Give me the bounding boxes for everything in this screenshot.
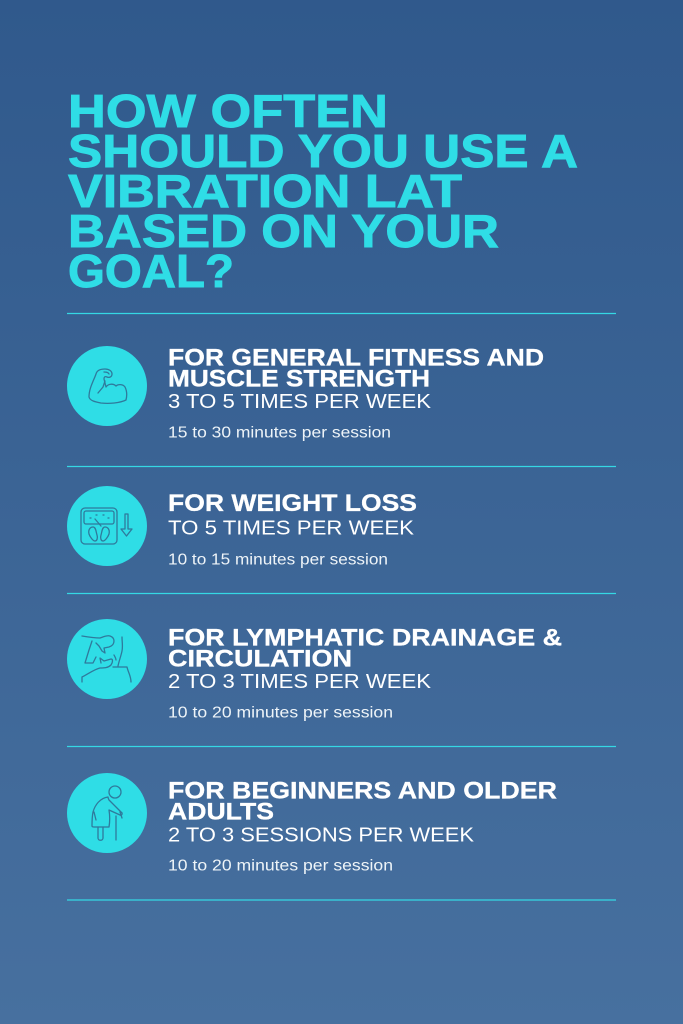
heading bbox=[168, 344, 544, 392]
heading bbox=[168, 778, 557, 826]
frequency: 3 TO 5 TIMES PER WEEK bbox=[168, 391, 432, 413]
frequency: TO 5 TIMES PER WEEK bbox=[168, 518, 415, 540]
heading: MUSCLE STRENGTH bbox=[168, 366, 430, 392]
title: VIBRATION LAT bbox=[68, 165, 462, 217]
icon: scale with down arrow bbox=[67, 486, 147, 566]
heading: FOR GENERAL FITNESS AND bbox=[168, 344, 544, 372]
title: HOW OFTEN bbox=[68, 85, 388, 137]
icon: older person with cane bbox=[67, 773, 147, 853]
icon: flexed arm bbox=[67, 346, 147, 426]
heading: FOR BEGINNERS AND OLDER bbox=[168, 778, 557, 804]
icon: massage hands on torso bbox=[67, 619, 147, 699]
title bbox=[68, 85, 578, 297]
panel: weight loss bbox=[67, 486, 417, 568]
duration: 10 to 20 minutes per session bbox=[168, 704, 393, 722]
heading: ADULTS bbox=[168, 798, 274, 826]
heading: FOR WEIGHT LOSS bbox=[168, 490, 417, 517]
title: GOAL? bbox=[68, 245, 234, 297]
panel: general fitness and muscle strength bbox=[67, 344, 544, 442]
duration: 15 to 30 minutes per session bbox=[168, 424, 391, 442]
title: BASED ON YOUR bbox=[68, 205, 499, 257]
title: SHOULD YOU USE A bbox=[68, 125, 578, 177]
frequency: 2 TO 3 TIMES PER WEEK bbox=[168, 671, 432, 693]
duration: 10 to 15 minutes per session bbox=[168, 552, 388, 568]
duration: 10 to 20 minutes per session bbox=[168, 858, 393, 874]
frequency: 2 TO 3 SESSIONS PER WEEK bbox=[168, 824, 475, 846]
panel: lymphatic drainage and circulation bbox=[67, 619, 562, 722]
panel: beginners and older adults bbox=[67, 773, 557, 874]
heading: FOR LYMPHATIC DRAINAGE & bbox=[168, 624, 562, 652]
heading bbox=[168, 624, 562, 672]
heading: CIRCULATION bbox=[168, 646, 352, 672]
